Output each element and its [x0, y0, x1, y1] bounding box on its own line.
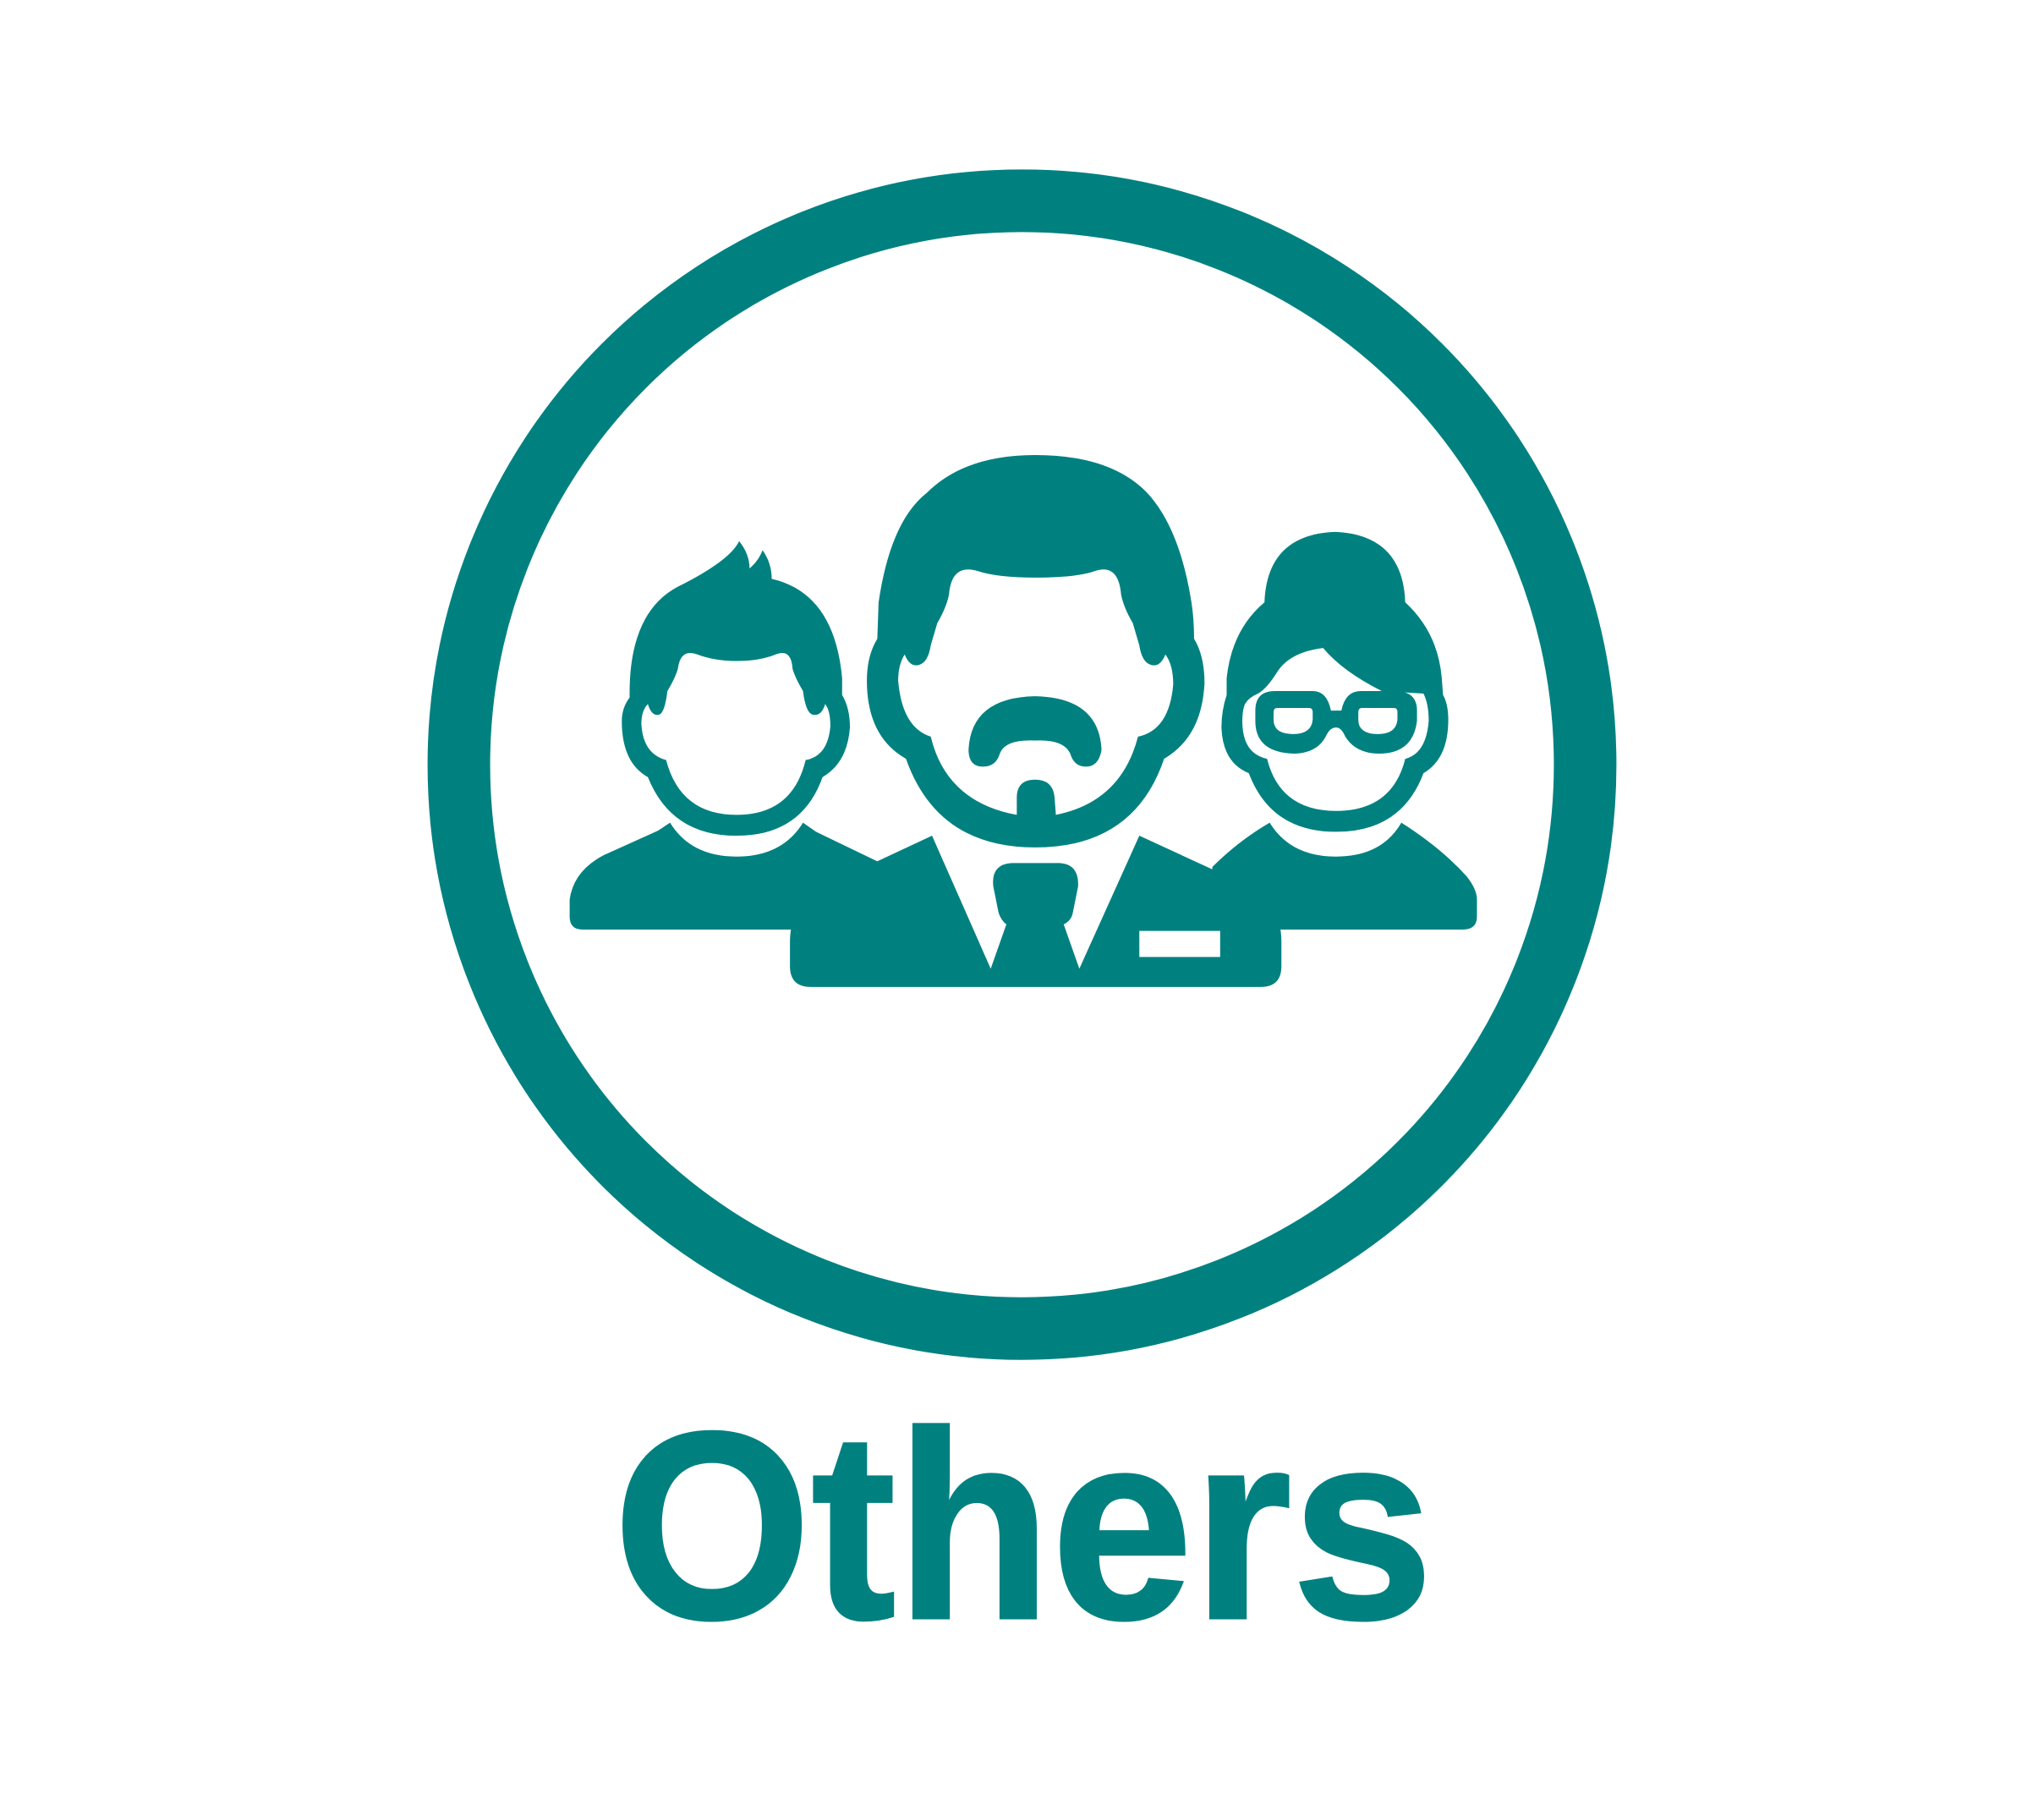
title: Others: Others — [613, 1376, 1433, 1675]
icon: left person — [570, 541, 886, 930]
name tag — [1139, 931, 1220, 957]
icon: group of three people — [570, 455, 1477, 987]
mustache — [968, 696, 1102, 766]
glasses — [1255, 691, 1417, 754]
body with tie — [790, 836, 1281, 987]
icon: right woman — [1213, 532, 1477, 930]
icon: center man — [790, 455, 1281, 987]
circle frame — [459, 200, 1585, 1329]
